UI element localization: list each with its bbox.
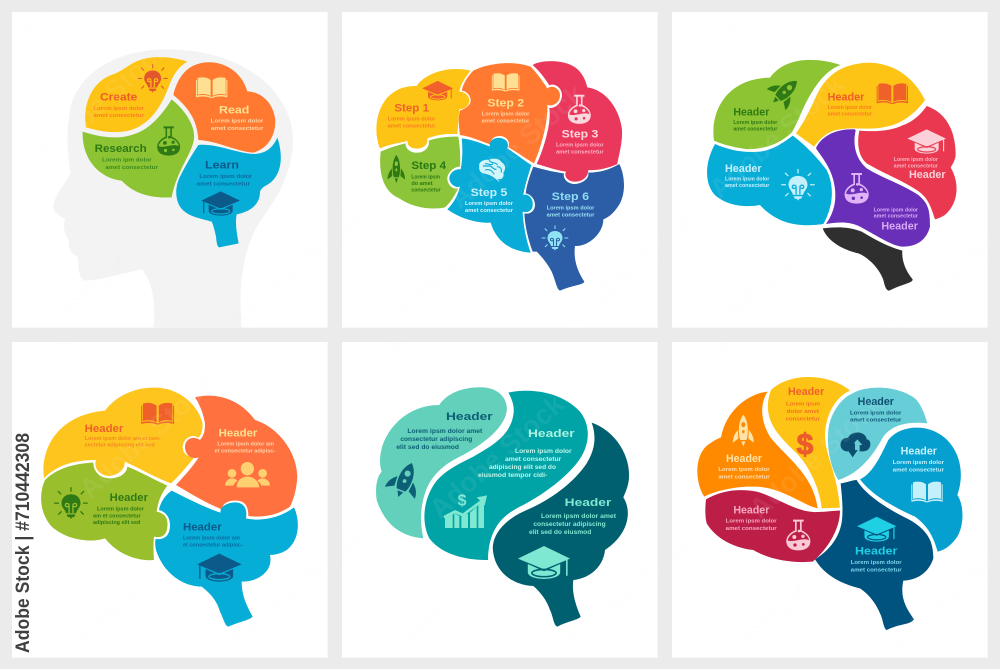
step 1 piece: Lorem ipsm dolor — [388, 117, 436, 123]
orange piece: et consectetur adipisc- — [215, 449, 275, 455]
region: Read: Lorem ipsm dolor — [211, 119, 264, 125]
navy lobe: Lorem ipsm dolor — [851, 560, 903, 566]
step 5 piece: Step 5 — [471, 187, 507, 199]
watermark overlay: Adobe — [665, 12, 744, 67]
region: Learn: amet consectetur — [197, 181, 251, 187]
blue lobe — [860, 428, 962, 552]
panel: head silhouette with four brain regions — [12, 12, 328, 328]
green lobe: Lorem ipsm dolor — [733, 120, 778, 126]
purple lobe: Lorem ipsm dolor — [874, 207, 919, 213]
orange lobe: amet consectetur — [718, 474, 771, 480]
panel: six-colour swirl brain — [672, 342, 988, 658]
green piece: Header — [110, 492, 148, 504]
mid teal wave: Header — [528, 428, 575, 440]
blue lobe: amet consectetur — [725, 183, 770, 189]
crimson lobe — [705, 490, 840, 562]
watermark overlay: Adobe Stock — [223, 203, 370, 339]
watermark overlay: Adobe Stock — [553, 203, 700, 339]
icon: dollar sign: $ — [797, 428, 814, 461]
blue lobe: amet consectetur — [893, 467, 945, 473]
step 6 piece: amet consectetur — [547, 212, 595, 218]
dark teal wave: elit sed do eiusmod — [529, 530, 592, 536]
red lobe: Lorem ipsm dolor — [894, 157, 939, 163]
icon: rocket — [733, 415, 754, 447]
blue lobe — [707, 136, 832, 225]
blue lobe: Header — [901, 445, 937, 457]
icon: book — [196, 77, 227, 98]
dark teal wave: Header — [565, 497, 611, 509]
icon: graduation cap — [422, 81, 453, 100]
watermark overlay: Stock — [68, 576, 150, 655]
step 3 piece: Lorem ipsm dolor — [556, 143, 605, 149]
watermark overlay: Stock — [53, 248, 135, 327]
green lobe: amet consectetur — [733, 126, 778, 132]
blue piece — [155, 491, 298, 627]
icon: graduation cap — [857, 517, 896, 542]
icon: light bulb — [781, 169, 815, 201]
navy lobe: Header — [855, 546, 897, 558]
icon: rocket — [764, 71, 806, 113]
step 1 piece: amet consectetur — [388, 123, 436, 129]
yellow piece: Header — [85, 423, 123, 435]
region: Learn: Learn — [205, 159, 239, 171]
orange lobe: Header — [726, 453, 762, 465]
icon: cloud with arrows — [841, 433, 870, 457]
watermark overlay: Adobe — [671, 335, 738, 399]
light teal wave: Lorem ipsm dolor amet — [407, 429, 482, 435]
watermark overlay: Adobe Stock — [558, 523, 705, 659]
icon: rocket — [383, 457, 427, 503]
light teal lobe: amet consectetur — [850, 418, 902, 424]
light teal wave: Header — [446, 411, 493, 423]
step 4 piece: do amet — [411, 181, 433, 187]
watermark overlay: Stock — [398, 576, 480, 655]
step 4 piece: Step 4 — [411, 160, 446, 172]
stock ID vertical credit: Adobe Stock | #710442308 — [12, 433, 34, 653]
region: Read — [173, 62, 275, 153]
icon: book — [877, 83, 908, 104]
icon: growth chart with dollar: $ — [458, 493, 467, 510]
region: Create — [85, 57, 187, 132]
yellow lobe: amet consectetur — [828, 112, 873, 118]
orange piece — [176, 396, 297, 517]
green piece — [41, 463, 168, 560]
orange lobe: Lorem ipsm dolor — [718, 467, 771, 473]
panel: four-part puzzle brain — [12, 342, 328, 658]
yellow lobe: Header — [788, 386, 824, 398]
step 6 piece: Step 6 — [552, 191, 589, 203]
blue piece: Header — [183, 522, 222, 534]
yellow lobe — [768, 377, 850, 508]
step 1 piece — [376, 69, 471, 149]
panel background — [12, 342, 328, 658]
mid teal wave: Lorem ipsm dolor — [515, 449, 572, 455]
watermark overlay: Stock — [388, 248, 470, 327]
green piece: Lorem ipsm dolor — [97, 506, 145, 512]
navy lobe — [815, 480, 933, 630]
light teal lobe: Lorem ipsm dolor — [850, 410, 902, 416]
watermark overlay: Adobe Stock — [743, 388, 890, 524]
yellow lobe: Lorem ipsm — [786, 402, 820, 408]
region: Create: Lorem ipsm dolor — [93, 106, 145, 112]
step 4 piece: Lorem ipsm — [411, 175, 440, 181]
step 2 piece: Step 2 — [487, 98, 524, 110]
red lobe — [858, 106, 957, 219]
icon: book — [492, 73, 519, 91]
orange piece: Header — [219, 428, 257, 440]
blue lobe: Lorem ipsm dolor — [725, 177, 770, 183]
step 5 piece — [447, 138, 533, 253]
step 4 piece: consectetur — [411, 187, 441, 193]
blue lobe: Lorem ipsm dolor — [893, 460, 945, 466]
mid teal wave: eiusmod tempor cidi- — [478, 473, 547, 479]
region: Research: Research — [95, 143, 147, 155]
black brain stem — [823, 227, 913, 291]
watermark overlay: Adobe Stock — [28, 33, 175, 169]
icon: light bulb — [542, 225, 568, 250]
region: Learn — [176, 138, 281, 247]
panel background — [672, 12, 988, 328]
icon: people — [225, 462, 270, 487]
mid teal wave — [424, 391, 588, 560]
watermark overlay: Adobe Stock — [703, 68, 850, 204]
region: Research — [83, 99, 194, 197]
region: Learn: Lorem ipsm dolor — [199, 174, 253, 180]
crimson lobe: Lorem ipsm dolor — [726, 519, 778, 525]
panel: brain with five lobes and black stem — [672, 12, 988, 328]
step 5 piece: amet consectetur — [465, 208, 514, 214]
step 3 piece — [533, 61, 622, 182]
navy lobe: amet consectetur — [851, 567, 903, 573]
watermark overlay: Adobe Stock — [443, 78, 590, 214]
blue piece: et consectetur adipisc- — [183, 543, 243, 549]
icon: graduation cap — [197, 554, 242, 582]
watermark overlay: Stock — [723, 248, 805, 327]
icon: graduation cap — [518, 546, 570, 579]
yellow piece: sectetur adipiscing elit sed — [85, 443, 155, 449]
region: Read: amet consectetur — [211, 126, 264, 132]
light teal wave: elit sed do eiusmod — [396, 445, 459, 451]
orange piece: Lorem ipsm dolor am — [217, 442, 274, 448]
crimson lobe: amet consectetur — [726, 526, 778, 532]
panel: three-wave teal brain — [342, 342, 658, 658]
icon: book — [141, 403, 174, 425]
panel background — [342, 342, 658, 658]
green piece: adipiscing elit sed — [93, 520, 140, 526]
icon: rocket — [388, 155, 405, 183]
yellow lobe: consectetur — [786, 416, 821, 422]
light teal wave: consectetur adipiscing — [400, 437, 473, 443]
step 2 piece: amet consectetur — [482, 118, 530, 124]
crimson lobe: Header — [733, 504, 769, 516]
light teal lobe — [828, 388, 927, 480]
yellow lobe — [796, 63, 925, 147]
dark teal wave: Lorem ipsm dolor amet — [541, 514, 616, 520]
step 4 piece — [380, 137, 460, 208]
orange lobe — [697, 392, 818, 508]
panel background — [342, 12, 658, 328]
icon: flask — [786, 520, 810, 550]
mid teal wave: amet consectetur — [505, 457, 562, 463]
purple lobe: Header — [881, 220, 918, 232]
purple lobe: amet consectetur — [874, 214, 919, 220]
light teal wave — [376, 387, 507, 538]
watermark overlay: Adobe — [341, 330, 408, 394]
mid teal wave: adipiscing elit sed do — [489, 465, 556, 471]
region: Create: Create — [100, 92, 137, 104]
icon: graduation cap — [201, 191, 240, 216]
green lobe: Header — [733, 107, 769, 119]
step 1 piece: Step 1 — [394, 103, 429, 115]
region: Read: Read — [219, 104, 249, 116]
yellow lobe: Lorem ipsm dolor — [828, 105, 873, 111]
region: Create: amet consectetur — [93, 113, 145, 119]
icon: brain — [479, 159, 505, 183]
icon: graduation cap — [907, 129, 946, 154]
red lobe: Header — [909, 169, 946, 181]
icon: growth chart with dollar — [443, 493, 487, 528]
region: Research: amet consectetur — [105, 165, 159, 171]
icon: light bulb — [54, 487, 88, 519]
icon: book — [911, 482, 943, 502]
dark teal wave: consectetur adipiscing — [533, 522, 606, 528]
red lobe: amet consectetur — [894, 163, 939, 169]
green piece: am et consectetur — [93, 513, 142, 519]
panel background — [672, 342, 988, 658]
step 3 piece: amet consectetur — [556, 150, 605, 156]
region: Research: Lorem ipm dolor — [102, 158, 153, 164]
watermark overlay: Adobe Stock — [223, 523, 370, 659]
yellow piece: Lorem ipsm dolor am et con- — [85, 436, 161, 442]
purple lobe — [816, 129, 930, 247]
green lobe — [713, 60, 841, 149]
yellow lobe: Header — [828, 92, 864, 104]
step 3 piece: Step 3 — [562, 129, 598, 141]
step 6 piece — [524, 164, 624, 291]
step 5 piece: Lorem ipsm dolor — [465, 201, 514, 207]
panel background — [12, 12, 328, 328]
step 2 piece — [459, 63, 560, 163]
icon: flask — [568, 95, 591, 124]
light teal lobe: Header — [858, 396, 894, 408]
head silhouette — [53, 49, 293, 327]
watermark overlay: Adobe Stock — [73, 368, 220, 504]
blue piece: Lorem ipsm dolor am — [183, 535, 240, 541]
yellow lobe: dolor amet — [787, 409, 819, 415]
icon: flask — [157, 126, 180, 156]
yellow piece — [43, 388, 203, 483]
watermark overlay: Adobe Stock — [423, 388, 570, 524]
icon: flask — [845, 173, 869, 204]
watermark overlay: Adobe — [11, 330, 78, 394]
dark teal wave — [493, 423, 629, 627]
watermark overlay: Stock — [733, 576, 815, 655]
blue lobe: Header — [725, 163, 762, 175]
step 2 piece: Lorem ipsm dolor — [482, 111, 530, 117]
step 6 piece: Lorem ipsm dolor — [547, 205, 595, 211]
panel: six-step brain puzzle — [342, 12, 658, 328]
icon: light bulb — [138, 64, 168, 93]
